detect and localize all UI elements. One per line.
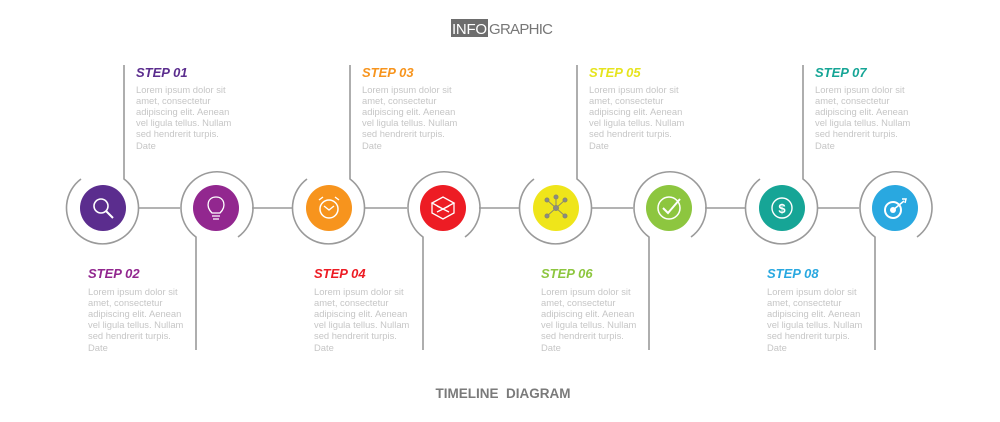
- text: step 07: amet, consectetur: [815, 95, 890, 106]
- text: step 02: vel ligula tellus. Nullam: [88, 319, 184, 330]
- text: step 04: Lorem ipsum dolor sit: [314, 286, 404, 297]
- text: step 07: Date: [815, 140, 835, 151]
- text: step 07: [815, 65, 911, 151]
- text: step 04: STEP 04: [314, 266, 366, 281]
- step 06 node: [634, 172, 706, 350]
- text: step 02: adipiscing elit. Aenean: [88, 308, 181, 319]
- text: step 04: adipiscing elit. Aenean: [314, 308, 407, 319]
- text: step 03: vel ligula tellus. Nullam: [362, 117, 458, 128]
- text: step 01: sed hendrerit turpis.: [136, 128, 219, 139]
- text: step 06: STEP 06: [541, 266, 593, 281]
- text: step 05: STEP 05: [589, 65, 641, 80]
- text: step 04: amet, consectetur: [314, 297, 389, 308]
- text: step 08: Lorem ipsum dolor sit: [767, 286, 857, 297]
- text: step 06: [541, 266, 637, 353]
- connectors: [139, 207, 859, 209]
- text: step 03: amet, consectetur: [362, 95, 437, 106]
- text: step 02: [88, 266, 184, 353]
- text: step 08: STEP 08: [767, 266, 819, 281]
- text: step 03: Lorem ipsum dolor sit: [362, 84, 452, 95]
- text: step 07: STEP 07: [815, 65, 867, 80]
- text: step 08: amet, consectetur: [767, 297, 842, 308]
- text: step 06: amet, consectetur: [541, 297, 616, 308]
- text: step 05: amet, consectetur: [589, 95, 664, 106]
- text: step 04: sed hendrerit turpis.: [314, 330, 397, 341]
- text: step 05: sed hendrerit turpis.: [589, 128, 672, 139]
- text: step 02: STEP 02: [88, 266, 140, 281]
- text: step 07: adipiscing elit. Aenean: [815, 106, 908, 117]
- text: step 01: adipiscing elit. Aenean: [136, 106, 229, 117]
- text: step 06: Date: [541, 342, 561, 353]
- step 02 node: [181, 172, 253, 350]
- text: step 03: STEP 03: [362, 65, 414, 80]
- step 05 node: [520, 65, 592, 244]
- text: step 01: amet, consectetur: [136, 95, 211, 106]
- footer title: TIMELINE DIAGRAM: [436, 386, 570, 401]
- text: step 01: Lorem ipsum dolor sit: [136, 84, 226, 95]
- text: step 03: [362, 65, 458, 151]
- step 03 node: [292, 65, 364, 244]
- text: step 06: adipiscing elit. Aenean: [541, 308, 634, 319]
- text: step 07: Lorem ipsum dolor sit: [815, 84, 905, 95]
- text: step 03: Date: [362, 140, 382, 151]
- step 08 node: [860, 172, 932, 350]
- text: step 05: vel ligula tellus. Nullam: [589, 117, 685, 128]
- text: step 01: [136, 65, 232, 151]
- title: GRAPHIC: [489, 21, 553, 38]
- text: step 03: sed hendrerit turpis.: [362, 128, 445, 139]
- text: step 01: vel ligula tellus. Nullam: [136, 117, 232, 128]
- title: INFO: [452, 21, 487, 38]
- text: step 05: adipiscing elit. Aenean: [589, 106, 682, 117]
- text: step 04: [314, 266, 410, 353]
- text: step 04: vel ligula tellus. Nullam: [314, 319, 410, 330]
- text: step 08: sed hendrerit turpis.: [767, 330, 850, 341]
- text: step 08: adipiscing elit. Aenean: [767, 308, 860, 319]
- text: step 04: Date: [314, 342, 334, 353]
- text: step 05: [589, 65, 685, 151]
- text: step 08: [767, 266, 863, 353]
- text: step 06: vel ligula tellus. Nullam: [541, 319, 637, 330]
- step 04 node: [408, 172, 480, 350]
- text: step 07: sed hendrerit turpis.: [815, 128, 898, 139]
- text: step 05: Date: [589, 140, 609, 151]
- step 07 node: $: [778, 201, 786, 216]
- title: [451, 19, 553, 38]
- text: step 06: sed hendrerit turpis.: [541, 330, 624, 341]
- text: step 05: Lorem ipsum dolor sit: [589, 84, 679, 95]
- text: step 01: Date: [136, 140, 156, 151]
- text: step 08: vel ligula tellus. Nullam: [767, 319, 863, 330]
- text: step 02: Lorem ipsum dolor sit: [88, 286, 178, 297]
- text: step 08: Date: [767, 342, 787, 353]
- text: step 02: Date: [88, 342, 108, 353]
- text: step 06: Lorem ipsum dolor sit: [541, 286, 631, 297]
- text: step 03: adipiscing elit. Aenean: [362, 106, 455, 117]
- text: step 01: STEP 01: [136, 65, 188, 80]
- text: step 07: vel ligula tellus. Nullam: [815, 117, 911, 128]
- text: step 02: amet, consectetur: [88, 297, 163, 308]
- step 01 node: [67, 65, 138, 244]
- step 07 node: [746, 65, 818, 244]
- text: step 02: sed hendrerit turpis.: [88, 330, 171, 341]
